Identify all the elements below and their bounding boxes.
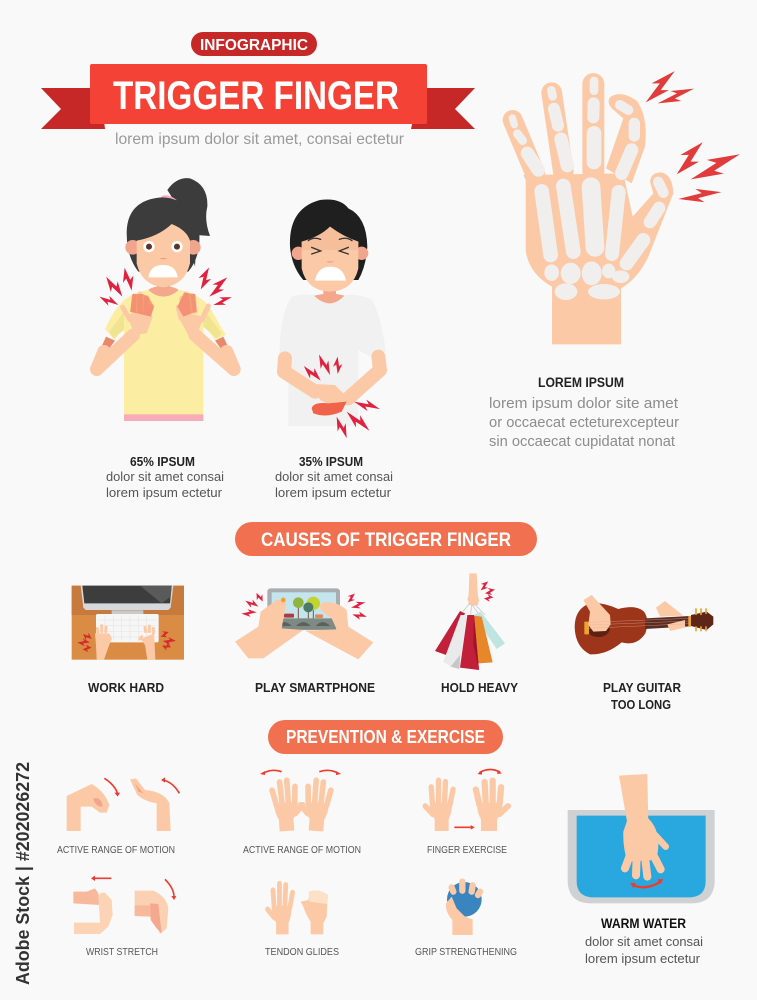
exercise: wrist stretch [73,876,176,934]
label: play smartphone: PLAY SMARTPHONE [255,680,375,695]
header: infographic pill [191,32,317,56]
icon: guitar playing [575,595,713,654]
label: hold heavy: HOLD HEAVY [441,680,518,695]
illustration: warm water basin [568,774,715,903]
icon: work hard desk [72,586,184,660]
text block: warm water [585,916,703,966]
exercise: active range of motion, finger spread [260,770,341,832]
label: play guitar too long: PLAY GUITAR [603,680,682,695]
stat: 35% ipsum [275,454,393,500]
icon: heavy shopping bags [435,573,505,670]
text block: lorem ipsum description [489,375,679,450]
label: work hard: WORK HARD [88,680,164,695]
label: wrist stretch: WRIST STRETCH [86,947,158,958]
illustration: hand skeleton with pain bolts [512,65,745,344]
stat: 35% ipsum: lorem ipsum ectetur [275,485,392,500]
stat: 35% ipsum: 35% IPSUM [299,454,363,469]
text block: lorem ipsum description: LOREM IPSUM [538,375,624,390]
character: woman with sore hands [95,178,235,421]
subtitle: lorem ipsum dolor sit amet, consai ectetur [115,131,404,148]
heading: prevention and exercise: PREVENTION & EXERCISE [286,727,485,747]
header: infographic pill: INFOGRAPHIC [200,37,308,54]
text block: warm water: dolor sit amet consai [585,934,703,949]
exercise: tendon glides [268,884,328,934]
label: finger exercise: FINGER EXERCISE [427,845,507,856]
heading: causes of trigger finger [235,522,537,556]
text block: warm water: lorem ipsum ectetur [585,951,701,966]
heading: prevention and exercise [268,720,503,754]
text block: lorem ipsum description: or occaecat ecteturexcepteur [489,414,679,431]
label: active range of motion 1: ACTIVE RANGE OF MOTION [57,845,175,856]
exercise: finger exercise [425,769,508,831]
stock credit sidebar: Adobe Stock | #202026272 [12,762,33,985]
icon: smartphone in two hands [235,588,373,659]
text block: warm water: WARM WATER [601,916,686,931]
text block: lorem ipsum description: sin occaecat cupidatat nonat [489,433,676,450]
stat: 65% ipsum: dolor sit amet consai [106,469,224,484]
character: man with sore hands [279,199,386,440]
stat: 35% ipsum: dolor sit amet consai [275,469,393,484]
stat: 65% ipsum: 65% IPSUM [130,454,195,469]
label: grip strengthening: GRIP STRENGTHENING [415,947,517,958]
stat: 65% ipsum [106,454,224,500]
label: tendon glides: TENDON GLIDES [265,947,339,958]
label: play guitar too long: TOO LONG [611,697,671,712]
label: active range of motion 2: ACTIVE RANGE OF MOTION [243,845,361,856]
text block: lorem ipsum description: lorem ipsum dolor site amet [489,395,679,412]
label: play guitar too long [603,680,682,712]
heading: causes of trigger finger: CAUSES OF TRIGGER FINGER [261,530,511,551]
title ribbon banner: TRIGGER FINGER [113,74,399,118]
exercise: active range of motion, wrist flexion and extension [67,777,179,831]
stat: 65% ipsum: lorem ipsum ectetur [106,485,223,500]
exercise: grip strengthening [446,882,482,935]
title ribbon banner [41,64,475,129]
